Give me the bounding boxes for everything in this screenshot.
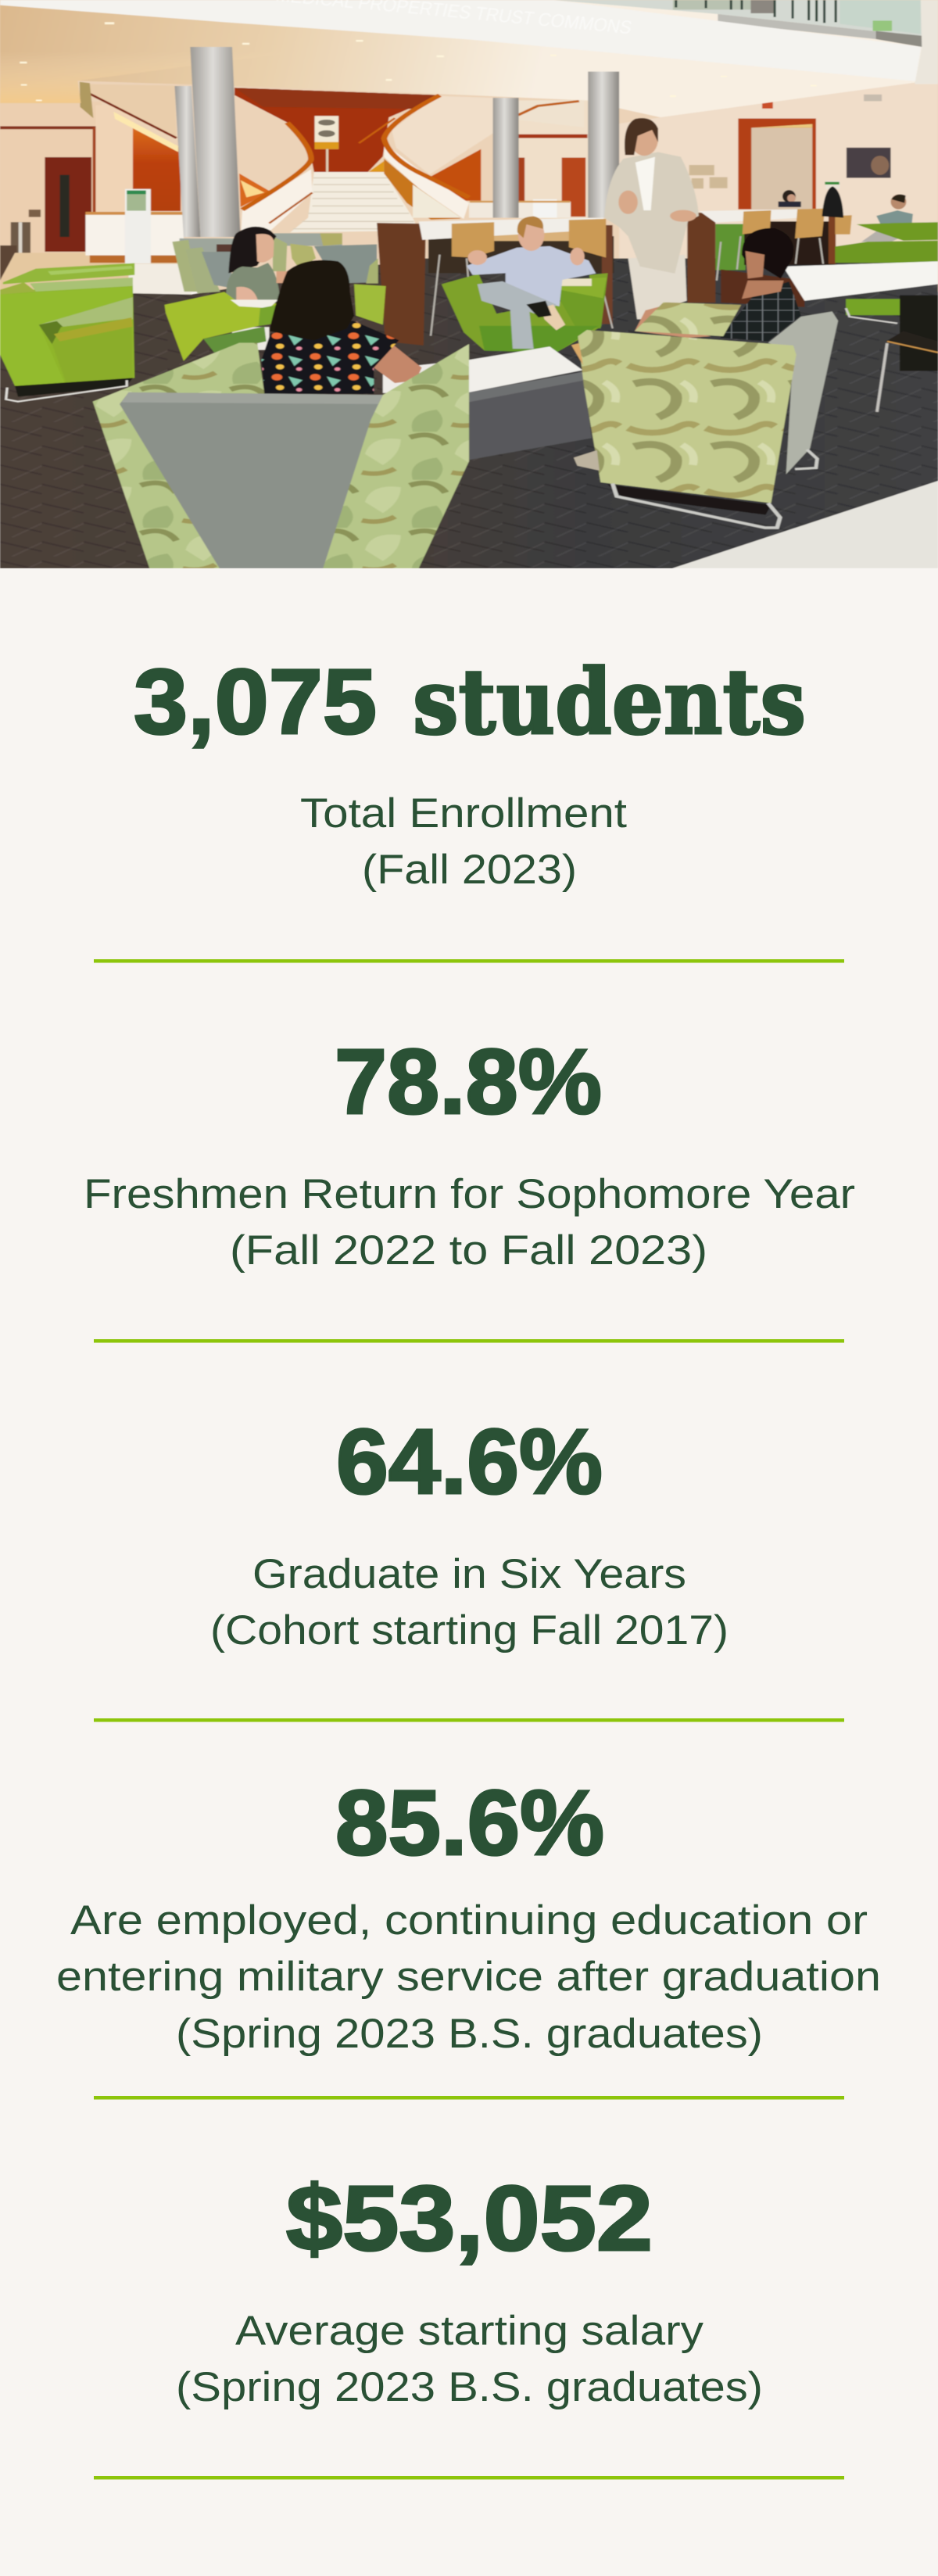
description: post-graduation outcomes: (Spring 2023 B.S. graduates) (176, 2011, 763, 2057)
staircase (241, 95, 469, 232)
description: average starting salary: (Spring 2023 B.S. graduates) (176, 2364, 763, 2410)
patterned armchair right (571, 303, 838, 528)
high table right (687, 209, 836, 303)
wooden stools (431, 209, 852, 336)
seated man in pale blue shirt (467, 217, 596, 349)
description: freshmen retention: (Fall 2022 to Fall 2023) (230, 1227, 707, 1274)
description: post-graduation outcomes: Are employed, continuing education or (70, 1897, 868, 1944)
description: total enrollment: (Fall 2023) (362, 847, 577, 893)
standing professor in beige suit (604, 118, 699, 319)
red wood wall (234, 88, 439, 172)
carpet floor (0, 258, 938, 568)
man with dark hair on right (635, 228, 801, 342)
silver columns (174, 47, 619, 237)
stat: six-year graduation (210, 1410, 729, 1653)
atrium tile floor (0, 253, 185, 296)
value: $53,052: $53,052 (286, 2167, 653, 2270)
left stair wall and orange panel (80, 82, 181, 214)
green chair of seated man (442, 273, 608, 353)
description: six-year graduation: (Cohort starting Fall 2017) (210, 1607, 729, 1653)
ceiling (0, 0, 938, 117)
curved stair walls (234, 95, 493, 207)
description: freshmen retention (84, 1171, 855, 1274)
description: total enrollment (300, 790, 627, 893)
description: freshmen retention: Freshmen Return for Sophomore Year (84, 1171, 855, 1217)
value: 85.6%: 85.6% (335, 1772, 604, 1875)
stat: freshmen retention (84, 1030, 855, 1274)
stat: total enrollment (134, 650, 806, 893)
description: average starting salary: Average starting salary (235, 2308, 704, 2354)
green lounge chairs far right (835, 222, 938, 324)
description: total enrollment: Total Enrollment (300, 790, 627, 837)
left wall with red door (0, 102, 102, 281)
stat: post-graduation outcomes (56, 1772, 881, 2057)
stat: average starting salary (176, 2167, 763, 2410)
value: 78.8%: 78.8% (335, 1030, 602, 1134)
grey-backed chairs behind seated woman (172, 233, 378, 293)
balcony above (553, 0, 938, 84)
recessed ceiling lights (20, 22, 817, 101)
white table right (721, 261, 938, 371)
woman with dark curly hair (226, 227, 292, 350)
description: average starting salary (176, 2308, 763, 2410)
white coffee table (383, 346, 592, 461)
back wall centre right with doors (469, 100, 588, 218)
value: 3,075 students: students (413, 650, 806, 755)
white fascia with lettering (0, 0, 922, 81)
description: six-year graduation: Graduate in Six Years (252, 1551, 686, 1597)
right wall (619, 83, 938, 258)
value: 64.6%: 64.6% (336, 1410, 603, 1514)
description: six-year graduation (210, 1551, 729, 1653)
woman in floral dress seen from behind (261, 260, 422, 394)
background people seated by the wall (779, 186, 913, 242)
reception counter and kiosk (85, 189, 184, 263)
pale tile floor bottom right (672, 481, 938, 568)
value: 3,075 students: 3,075 (134, 650, 377, 754)
description: post-graduation outcomes: entering military service after graduation (56, 1954, 881, 2000)
low green chair behind, far left (3, 263, 134, 285)
description: post-graduation outcomes (56, 1897, 881, 2057)
bar stool foreground right (877, 331, 938, 412)
patterned armchair left with grey back panel (93, 343, 469, 568)
lime chair with seated woman (164, 285, 386, 361)
high table left (377, 218, 614, 346)
photo: students and professor in atrium commons (0, 0, 938, 568)
green lounge chair left (0, 278, 134, 402)
